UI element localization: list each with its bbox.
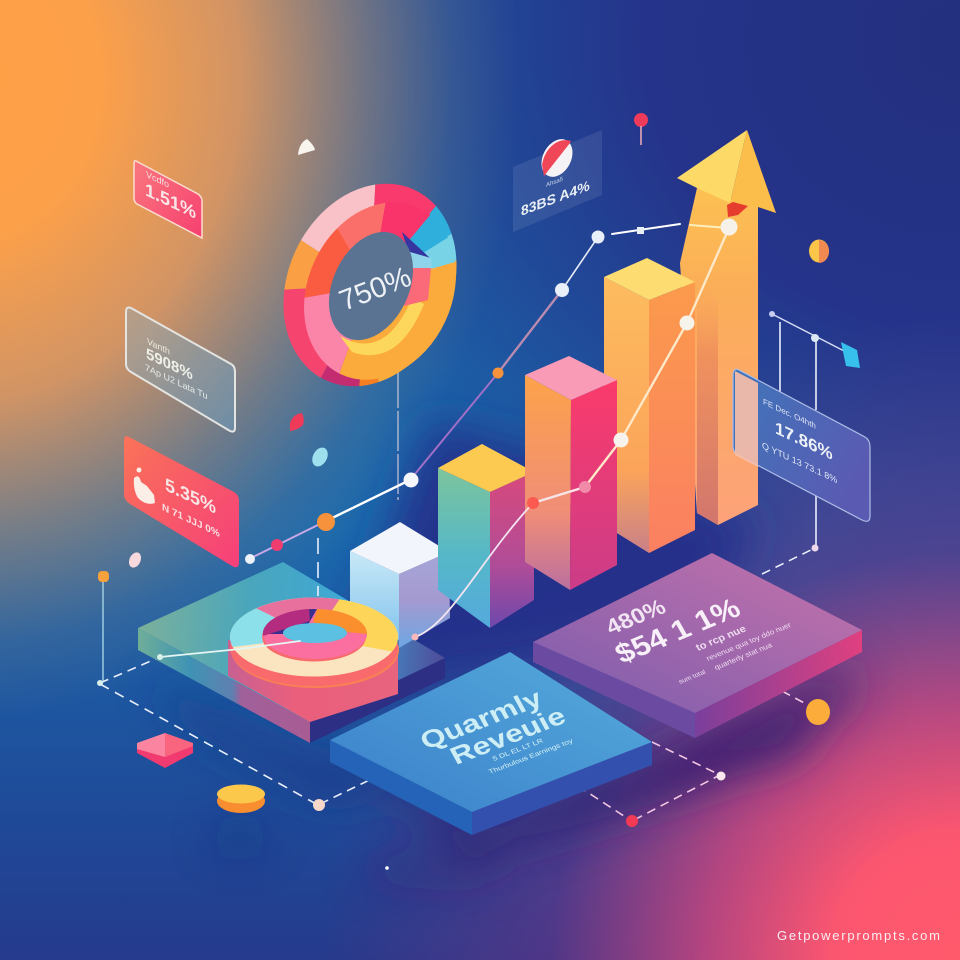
- card: coral 5.35%: [124, 436, 239, 567]
- ring hole: [312, 218, 430, 354]
- bar 2: green and magenta: [438, 444, 534, 628]
- line chart: second trend line: [160, 228, 729, 657]
- chart: flat donut on platform: [230, 605, 399, 688]
- line chart: main trend line: [247, 224, 728, 560]
- ring outer band: [283, 184, 457, 386]
- dashed guide lines: [100, 314, 850, 820]
- card: 1.51%: Vcdfo: [146, 169, 169, 191]
- panel: purple metric plate: to rcp nue: [694, 623, 748, 654]
- card: glass 5908%: 7Ap U2 Lata Tu: [145, 362, 207, 402]
- card: glass 5908%: 5908%: [146, 346, 193, 384]
- arrow: rising yellow arrow: [677, 130, 776, 525]
- card: blue 17.86%: Q YTU 13 73.1 8%: [762, 440, 838, 486]
- icon: pink gem: [137, 733, 193, 768]
- panel: quarterly revenue plate: Thurbulous Earnings toy: [487, 737, 575, 776]
- chart markers: [97, 218, 819, 870]
- bar 1: white cube: [350, 522, 450, 648]
- quarterly revenue title: Quarmly: [415, 684, 547, 755]
- card: blue 17.86%: [733, 369, 870, 521]
- card: 1.51%: 1.51%: [145, 180, 196, 224]
- card: coral 5.35%: 5.35%: [165, 475, 216, 519]
- bar 3: pink and orange: [525, 356, 617, 590]
- panel: purple metric plate: [533, 553, 862, 738]
- floor shadows: [150, 420, 880, 880]
- card: glass with pie icon: 83BS A4%: [521, 178, 590, 220]
- ring front face: [304, 203, 456, 380]
- panel: quarterly revenue plate: Reveuie: [445, 702, 571, 770]
- panel: purple metric plate: sum total: [678, 669, 708, 686]
- panel: quarterly revenue plate: 5 DL EL LT LR: [491, 736, 545, 763]
- icon: gold coin: [217, 784, 265, 813]
- decorative: floating shapes: [127, 113, 860, 725]
- purple plate headline: 480%: [601, 594, 670, 639]
- card: glass with pie icon: Ahsa5: [546, 176, 564, 189]
- panel: purple metric plate: $54 1 1%: [610, 593, 746, 670]
- panel: quarterly revenue plate: [330, 652, 652, 835]
- card: glass with pie icon: [513, 130, 602, 232]
- card: coral 5.35%: N 71 JJJ 0%: [162, 501, 220, 540]
- icon: small pie: [535, 134, 579, 182]
- ring value: 750%: [335, 261, 416, 318]
- bar 4: tall orange: [604, 258, 695, 553]
- card: blue 17.86%: 17.86%: [775, 418, 833, 464]
- card: blue 17.86%: FE Dec. O4hth: [763, 396, 816, 431]
- icon: hand: [134, 468, 155, 504]
- panel: purple metric plate: quarterly stat nua: [713, 640, 774, 672]
- watermark: Getpowerprompts.com: [777, 928, 942, 943]
- hole inner wall: [402, 232, 432, 306]
- panel: left platform: [138, 538, 445, 743]
- card: glass 5908%: [126, 308, 235, 432]
- panel: purple metric plate: revenue qua toy ddo nuer: [705, 620, 793, 663]
- card: glass 5908%: Vanth: [147, 336, 170, 358]
- chart: donut ring with 750%: [283, 184, 457, 386]
- card: 1.51%: [134, 161, 202, 238]
